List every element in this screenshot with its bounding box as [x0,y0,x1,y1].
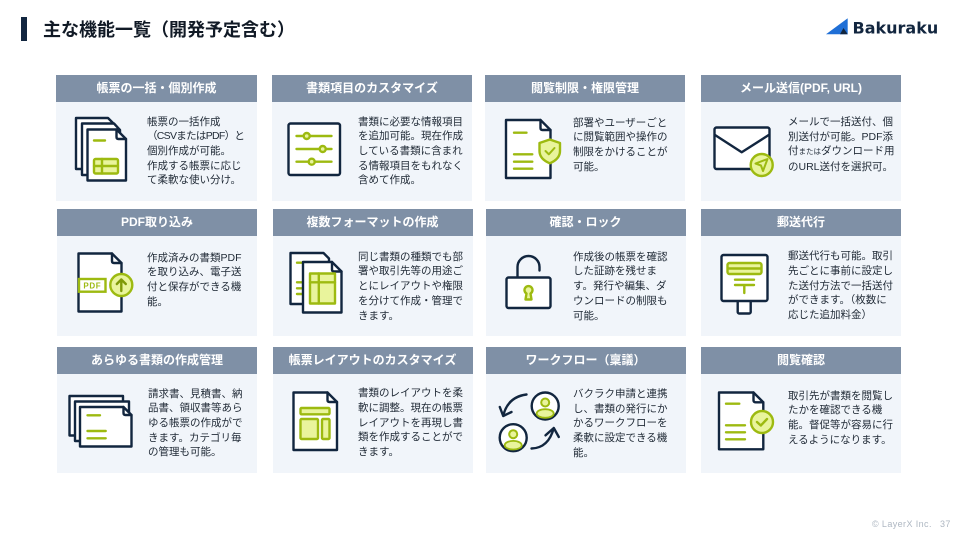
description: ができます。（枚数に [788,294,887,306]
description: した証跡を残せま [573,265,657,277]
description: レイアウトを再現し書 [358,417,463,429]
heading: 閲覧制限・権限管理 [531,81,639,95]
icon: post box [720,254,769,315]
description: 取引先が書類を閲覧し [788,390,893,402]
description [788,116,894,173]
panel: 書類項目のカスタマイズ [272,75,472,201]
panel: 帳票の一括・個別作成 [56,75,257,201]
description: （CSVまたはPDF）と [147,130,244,142]
description: 付と保存ができる機 [147,281,241,293]
icon: stacked documents with table [74,116,128,182]
description: の管理も可能。 [148,446,222,458]
description: のURL送付を選択可。 [788,161,893,173]
heading: 書類項目のカスタマイズ [306,81,438,95]
description: きます。 [358,310,399,322]
description: を追加可能。現在作成 [358,130,463,142]
description [573,251,668,322]
heading: PDF取り込み [121,215,193,229]
heading [272,75,472,102]
icon: two documents with layout [289,252,343,314]
footer: copyright and page number: © LayerX Inc. [872,519,932,529]
description [358,251,463,322]
panel: 帳票レイアウトのカスタマイズ [272,347,472,473]
heading [485,75,685,102]
description: 帳票の一括作成 [147,116,220,128]
description: を取り込み、電子送 [147,266,242,278]
description: きます。 [358,446,399,458]
title bar accent [21,17,27,41]
description: 先ごとに事前に設定し [788,265,893,277]
description: たかを確認できる機 [788,404,882,416]
heading [701,209,901,236]
icon: envelope with send badge [713,126,774,178]
heading: メール送信(PDF, URL) [740,81,862,95]
description: に閲覧範囲や操作の [573,131,668,143]
footer: copyright and page number: 37 [940,519,951,529]
description: 作成後の帳票を確認 [573,251,668,263]
icon: sliders [287,122,342,176]
panel: 複数フォーマットの作成 [272,209,472,336]
description: を分けて作成・管理で [358,295,463,307]
panel: 確認・ロック [486,209,686,336]
heading: あらゆる書類の作成管理 [91,353,223,367]
description: 部署やユーザーごと [573,116,667,128]
panel: PDF取り込み [57,209,257,336]
heading [701,347,901,374]
heading [56,75,257,102]
heading [701,75,901,102]
heading: 複数フォーマットの作成 [306,215,438,229]
description: 同じ書類の種類でも部 [358,251,463,263]
heading: 郵送代行 [777,215,825,229]
logo: Bakuraku: Bakuraku [852,18,938,38]
description [573,388,668,459]
icon: layout document [292,391,338,452]
description: 署や取引先等の用途ご [358,265,463,277]
heading [486,209,686,236]
heading [57,347,257,374]
heading: 帳票の一括・個別作成 [96,81,216,95]
description: 付またはダウンロード用 [788,145,894,157]
description [358,387,463,458]
icon: document with check badge [718,391,774,450]
description: す。発行や編集、ダ [573,280,666,292]
description: ゆる帳票の作成がで [148,417,242,429]
description: 品書、領収書等あら [148,402,242,414]
description: 書類のレイアウトを柔 [358,387,463,399]
description [788,250,893,321]
description: 能。督促等が容易に行 [788,419,893,431]
title: 主な機能一覧（開発予定含む） [43,20,295,40]
heading [272,209,472,236]
description [147,116,244,186]
description: ウンロードの制限も [573,295,668,307]
heading [57,209,257,236]
heading: 帳票レイアウトのカスタマイズ [289,353,456,367]
icon: stacked landscape documents [68,394,133,448]
description: 可能。 [573,310,604,322]
description [788,390,893,446]
description: 作成する帳票に応じ [147,160,242,172]
description: 柔軟に設定できる機 [573,432,667,444]
panel: あらゆる書類の作成管理 [57,347,257,473]
panel: ワークフロー（稟議） [486,347,686,473]
description: きます。カテゴリ毎 [148,432,241,444]
description: 能。 [147,296,168,308]
description: メールで一括送付、個 [788,116,893,128]
description: 含めて作成。 [358,174,421,186]
panel: 郵送代行 [701,209,901,336]
description: 能。 [573,447,594,459]
description: 個別作成が可能。 [147,145,231,157]
icon: approval workflow [498,391,560,452]
description: バクラク申請と連携 [573,388,668,400]
description: 郵送代行も可能。取引 [788,250,893,262]
description: とにレイアウトや権限 [358,280,463,292]
description [147,252,242,308]
icon: document with shield [504,118,562,180]
heading [272,347,472,374]
panel: 閲覧制限・権限管理 [485,75,685,201]
icon: PDF document with upload [77,252,134,313]
description: 書類に必要な情報項目 [358,116,463,128]
description: し、書類の発行にか [573,402,668,414]
description: 制限をかけることが [573,146,668,158]
description: 別送付が可能。PDF添 [788,130,893,142]
description [148,388,242,458]
icon: PDF document with upload: PDF [83,282,101,290]
heading [486,347,686,374]
description: かるワークフローを [573,417,668,429]
description: 応じた追加料金） [788,309,872,321]
heading: 閲覧確認 [777,353,825,367]
description: て柔軟な使い分け。 [147,174,241,186]
heading: 確認・ロック [549,215,622,229]
panel: メール送信 [701,75,901,201]
description [573,116,668,173]
description: る情報項目をもれなく [358,160,463,172]
description: している書類に含まれ [358,145,463,157]
description [358,116,463,186]
heading: ワークフロー（稟議） [525,353,646,367]
description: 軟に調整。現在の帳票 [358,402,463,414]
description: 可能。 [573,161,604,173]
icon: open padlock [505,254,552,310]
description: えるようになります。 [788,434,892,446]
description: 請求書、見積書、納 [148,388,242,400]
description: た送付方法で一括送付 [788,280,893,292]
panel: 閲覧確認 [701,347,901,473]
description: 作成済みの書類PDF [147,252,242,264]
description: 類を作成することがで [358,431,463,443]
